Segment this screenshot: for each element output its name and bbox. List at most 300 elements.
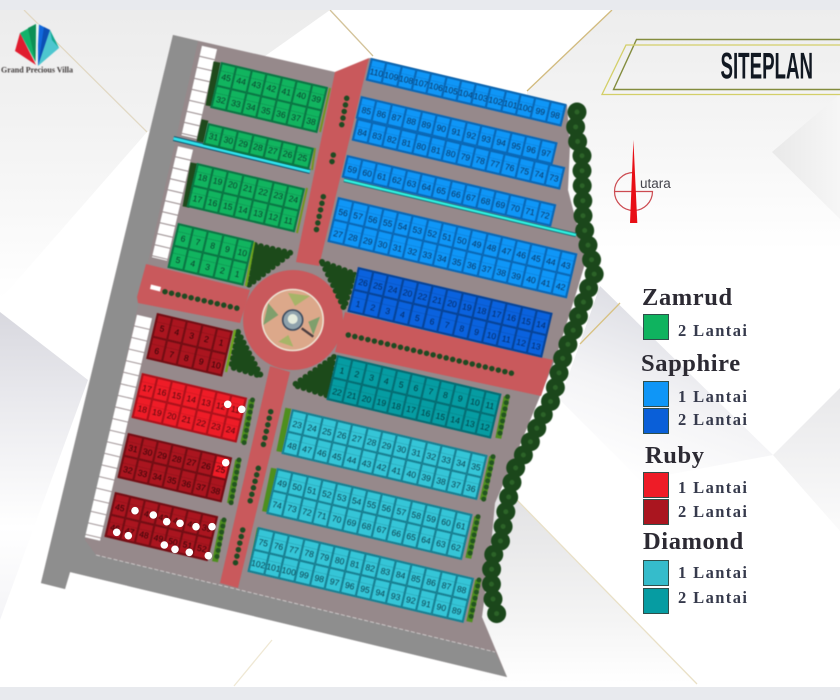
text: 56 [338, 206, 349, 218]
text: 11 [230, 404, 241, 415]
text: 73 [286, 503, 297, 515]
text: 87 [441, 580, 453, 591]
text: 51 [306, 485, 317, 496]
text: 33 [137, 467, 149, 479]
text: 60 [362, 167, 373, 179]
text: 21 [242, 183, 253, 195]
text: 67 [465, 192, 477, 204]
legend: Sapphire 1 floor swatch [643, 381, 669, 407]
legend: Ruby 2 floors swatch [643, 499, 669, 525]
text: 12 [267, 211, 279, 223]
text: 43 [560, 259, 572, 271]
text: 85 [410, 572, 422, 584]
text: 4 [190, 258, 197, 269]
text: 77 [489, 158, 500, 170]
north compass: utara: utara [640, 176, 671, 191]
logo: Grand Precious Villa: Grand Precious Villa [1, 64, 74, 74]
text: 104 [457, 87, 474, 100]
text: 32 [426, 451, 437, 462]
text: 50 [456, 234, 468, 246]
text: 103 [472, 91, 489, 104]
text: 82 [365, 562, 376, 573]
text: 57 [395, 506, 407, 518]
text: 37 [451, 479, 462, 491]
text: 6 [153, 345, 160, 356]
text: 21 [432, 294, 443, 306]
text: 35 [260, 104, 272, 116]
text: 55 [382, 217, 394, 229]
text: 40 [406, 468, 417, 480]
text: 14 [186, 393, 197, 405]
text: 45 [531, 252, 542, 264]
text: 37 [290, 111, 302, 123]
text: 88 [456, 583, 468, 595]
text: 34 [437, 252, 448, 264]
text: 30 [142, 446, 154, 458]
text: 69 [345, 517, 357, 529]
text: 18 [391, 400, 402, 412]
text: 41 [391, 465, 403, 477]
text: 62 [391, 174, 403, 186]
text: 25 [215, 463, 227, 475]
legend: Diamond 2 floors label: 2 Lantai [678, 588, 748, 607]
text: 20 [227, 180, 238, 191]
text: 32 [407, 245, 418, 257]
text: 94 [375, 587, 386, 598]
text: 25 [297, 152, 309, 164]
text: 75 [258, 536, 269, 548]
text: 1 [355, 298, 362, 309]
tree rows along roads [165, 98, 515, 565]
hedges beside blocks [186, 62, 508, 622]
text: 34 [456, 458, 467, 470]
text: 3 [204, 261, 211, 272]
text: 13 [252, 208, 264, 220]
text: 64 [420, 534, 431, 546]
text: 40 [187, 519, 198, 531]
text: 78 [474, 155, 486, 167]
text: 28 [347, 231, 359, 243]
legend: Diamond 1 floor label: 1 Lantai [678, 563, 748, 582]
text: 97 [329, 576, 341, 588]
text: 109 [383, 70, 399, 83]
text: 17 [491, 308, 503, 320]
legend: Sapphire heading: Sapphire [641, 350, 741, 377]
access road strip [41, 35, 507, 677]
text: 20 [361, 393, 373, 405]
legend: Zamrud 2 floors swatch [643, 314, 669, 340]
text: 8 [442, 390, 449, 400]
text: 7 [444, 319, 451, 330]
text: 6 [429, 316, 436, 327]
legend: Zamrud 2 floors label: 2 Lantai [678, 321, 748, 340]
text: 50 [291, 481, 303, 493]
text: 23 [210, 421, 222, 433]
text: 24 [287, 194, 299, 206]
text: 76 [273, 540, 285, 552]
text: 27 [267, 145, 279, 157]
text: 76 [504, 162, 515, 174]
text: 15 [521, 315, 532, 327]
text: 8 [183, 352, 190, 363]
text: 95 [360, 583, 371, 595]
text: 36 [465, 483, 477, 494]
text: 4 [173, 327, 180, 338]
text: 43 [250, 79, 262, 91]
text: 49 [153, 533, 164, 545]
text: 48 [486, 241, 498, 253]
text: 75 [518, 165, 530, 177]
sapphire blocks [326, 57, 578, 358]
text: 29 [238, 138, 249, 150]
text: 41 [540, 277, 552, 289]
legend: Diamond heading: Diamond [643, 528, 744, 555]
text: 1 [217, 337, 224, 348]
land area [41, 35, 587, 677]
text: 14 [237, 204, 248, 216]
text: 30 [377, 238, 389, 250]
text: 22 [332, 386, 343, 398]
text: 81 [430, 144, 442, 156]
text: 38 [305, 115, 317, 127]
text: 1 [339, 365, 346, 376]
text: 38 [436, 475, 447, 487]
text: 3 [369, 372, 375, 383]
text: 99 [534, 106, 546, 118]
text: 93 [390, 590, 402, 602]
text: 15 [222, 200, 233, 212]
text: 55 [365, 499, 377, 511]
text: 20 [402, 287, 414, 299]
text: 96 [344, 579, 356, 591]
text: 38 [496, 266, 507, 278]
text: 84 [356, 127, 368, 139]
text: 24 [387, 283, 399, 295]
text: 16 [506, 311, 517, 323]
text: 46 [316, 447, 328, 459]
text: 26 [282, 148, 294, 160]
text: 12 [479, 421, 491, 433]
legend: Diamond 2 floors swatch [643, 588, 669, 614]
text: 5 [158, 323, 165, 334]
text: 28 [366, 436, 378, 448]
text: 83 [380, 565, 392, 577]
text: 81 [400, 137, 412, 149]
text: 18 [137, 404, 148, 416]
text: 46 [516, 248, 527, 260]
text: 9 [224, 243, 231, 254]
text: 36 [181, 477, 193, 489]
text: 102 [251, 557, 267, 570]
text: 51 [182, 540, 193, 552]
triangular tree gardens [231, 245, 355, 396]
text: 25 [372, 280, 384, 292]
text: 91 [450, 126, 462, 138]
small white gate [150, 284, 161, 292]
text: 101 [502, 98, 518, 111]
text: 34 [245, 101, 257, 113]
text: 4 [399, 309, 406, 320]
text: 70 [510, 202, 521, 214]
text: 56 [380, 502, 392, 514]
text: 13 [465, 417, 476, 429]
text: 22 [196, 418, 207, 430]
text: 74 [271, 499, 283, 511]
text: 105 [442, 84, 459, 97]
text: 108 [398, 73, 414, 86]
legend: Ruby heading: Ruby [645, 442, 705, 469]
text: 17 [405, 403, 417, 415]
text: 59 [347, 164, 358, 176]
legend: Ruby 1 floor swatch [643, 472, 669, 498]
text: 9 [474, 326, 480, 337]
text: 70 [331, 513, 342, 525]
text: 24 [225, 425, 237, 437]
text: 29 [157, 449, 168, 461]
text: 52 [427, 227, 438, 239]
text: 32 [123, 464, 134, 476]
text: 53 [412, 224, 423, 236]
text: 110 [368, 66, 384, 79]
zamrud blocks [166, 61, 329, 286]
text: 27 [351, 433, 363, 445]
text: 18 [476, 304, 488, 316]
text: 47 [501, 245, 513, 257]
text: 83 [371, 130, 383, 142]
text: 43 [143, 508, 155, 520]
text: 36 [466, 259, 478, 271]
text: 84 [395, 569, 407, 581]
text: 79 [319, 551, 331, 563]
text: 102 [487, 95, 503, 108]
text: 2 [370, 302, 377, 313]
text: 79 [459, 151, 471, 163]
legend: Sapphire 2 floors swatch [643, 408, 669, 434]
text: 18 [196, 172, 208, 184]
text: 106 [428, 80, 444, 93]
text: 35 [166, 474, 178, 486]
text: 20 [166, 411, 178, 423]
text: 27 [186, 456, 198, 468]
text: 39 [201, 522, 213, 534]
text: 13 [201, 397, 212, 408]
text: 69 [495, 199, 507, 211]
text: 95 [510, 140, 522, 152]
text: 42 [158, 512, 169, 524]
text: 45 [114, 502, 126, 513]
text: 26 [358, 276, 369, 288]
text: 51 [442, 231, 453, 243]
text: 98 [314, 572, 325, 584]
text: 54 [397, 220, 409, 232]
text: 80 [445, 148, 456, 160]
text: 4 [383, 376, 390, 386]
text: 100 [517, 102, 533, 115]
text: 74 [533, 169, 545, 181]
red roads and roundabout [137, 58, 553, 588]
text: 8 [459, 323, 466, 334]
text: 68 [360, 520, 372, 532]
text: 24 [307, 422, 318, 434]
text: 96 [525, 144, 537, 155]
text: 72 [301, 506, 312, 518]
text: 73 [548, 172, 559, 184]
text: 26 [336, 429, 348, 441]
legend: Zamrud heading: Zamrud [642, 284, 733, 311]
text: 36 [275, 108, 287, 120]
text: 100 [281, 564, 297, 577]
text: 5 [175, 254, 182, 265]
text: 47 [124, 526, 135, 538]
text: 11 [501, 333, 512, 345]
legend: Ruby 2 floors label: 2 Lantai [678, 502, 748, 521]
text: 30 [396, 444, 408, 455]
text: 42 [376, 461, 388, 473]
text: 21 [346, 389, 358, 401]
text: 23 [272, 190, 284, 202]
large tree line along east boundary [491, 112, 595, 615]
text: 1 [234, 268, 241, 279]
text: 20 [447, 297, 458, 309]
text: 91 [421, 597, 432, 609]
text: 31 [208, 131, 220, 143]
text: 63 [435, 538, 446, 550]
text: 61 [377, 171, 388, 183]
text: 26 [201, 459, 212, 471]
text: 44 [346, 454, 358, 466]
text: 7 [428, 386, 435, 397]
text: 34 [152, 471, 163, 482]
text: 19 [376, 396, 388, 408]
text: 40 [295, 89, 307, 101]
text: 99 [299, 569, 310, 580]
text: 16 [207, 197, 218, 209]
text: 72 [539, 209, 551, 221]
text: 66 [390, 527, 402, 539]
text: 29 [362, 235, 374, 247]
text: 101 [266, 561, 282, 574]
text: 2 [219, 265, 226, 276]
text: 77 [288, 544, 300, 555]
text: 14 [450, 414, 461, 426]
text: 10 [210, 359, 222, 371]
text: 52 [321, 488, 332, 500]
text: 21 [181, 414, 192, 426]
text: 67 [375, 524, 387, 536]
text: 2 [354, 369, 361, 379]
text: 82 [386, 134, 397, 146]
text: 68 [480, 195, 492, 207]
text: 90 [436, 601, 448, 613]
text: 86 [426, 576, 437, 588]
white parking bays [92, 48, 210, 539]
text: 65 [405, 531, 417, 543]
text: 5 [414, 312, 421, 323]
text: 44 [545, 255, 557, 267]
text: 7 [195, 236, 202, 247]
text: 35 [451, 256, 463, 268]
text: 78 [304, 547, 315, 559]
text: 94 [495, 136, 507, 148]
text: 19 [151, 407, 163, 419]
legend: Ruby 1 floor label: 1 Lantai [678, 478, 748, 497]
text: 88 [405, 115, 417, 127]
text: 14 [536, 318, 547, 330]
text: 3 [188, 330, 195, 341]
text: 107 [413, 77, 429, 90]
text: 89 [451, 605, 463, 617]
text: 31 [128, 442, 139, 454]
text: 33 [230, 97, 241, 109]
text: 56 [367, 213, 379, 225]
text: 11 [485, 400, 496, 411]
text: 62 [450, 541, 461, 553]
text: 28 [253, 141, 264, 153]
text: 39 [511, 270, 522, 282]
text: 80 [415, 141, 427, 153]
text: 6 [413, 383, 420, 393]
text: 35 [470, 461, 482, 473]
text: 92 [405, 594, 417, 606]
text: 40 [526, 273, 537, 285]
legend: Sapphire 2 floors label: 2 Lantai [678, 410, 748, 429]
text: 66 [451, 188, 462, 200]
text: 3 [385, 305, 392, 316]
text: 93 [480, 133, 492, 145]
text: 7 [168, 349, 175, 359]
text: 89 [420, 119, 432, 131]
text: 16 [420, 407, 432, 419]
text: 22 [257, 187, 269, 199]
text: 65 [436, 185, 447, 197]
diamond blocks [246, 354, 502, 624]
text: 86 [375, 108, 387, 120]
text: 45 [331, 451, 343, 463]
roundabout garden [262, 290, 323, 350]
text: 37 [195, 481, 207, 493]
legend: Sapphire 1 floor label: 1 Lantai [678, 387, 748, 406]
text: 42 [265, 82, 277, 94]
text: 50 [167, 536, 179, 548]
text: 45 [220, 72, 232, 84]
text: 80 [334, 554, 346, 566]
text: 46 [109, 523, 121, 535]
text: 12 [516, 336, 527, 348]
cyan water channels [174, 138, 576, 235]
text: 10 [486, 329, 498, 341]
text: 43 [361, 458, 373, 470]
text: 31 [411, 447, 422, 459]
text: 90 [435, 122, 447, 134]
text: 31 [392, 242, 404, 254]
text: 64 [421, 181, 433, 193]
text: 41 [172, 515, 184, 527]
text: 48 [138, 530, 150, 541]
text: 37 [481, 263, 493, 275]
text: 42 [555, 280, 567, 292]
text: 19 [211, 176, 223, 188]
text: 33 [441, 454, 452, 466]
text: 58 [410, 509, 422, 521]
text: 28 [171, 453, 183, 464]
text: 92 [465, 129, 477, 141]
text: 17 [142, 383, 153, 395]
text: 63 [406, 178, 418, 190]
text: 11 [283, 215, 294, 227]
text: 6 [180, 233, 187, 244]
text: 16 [156, 386, 168, 398]
text: 12 [215, 400, 227, 412]
